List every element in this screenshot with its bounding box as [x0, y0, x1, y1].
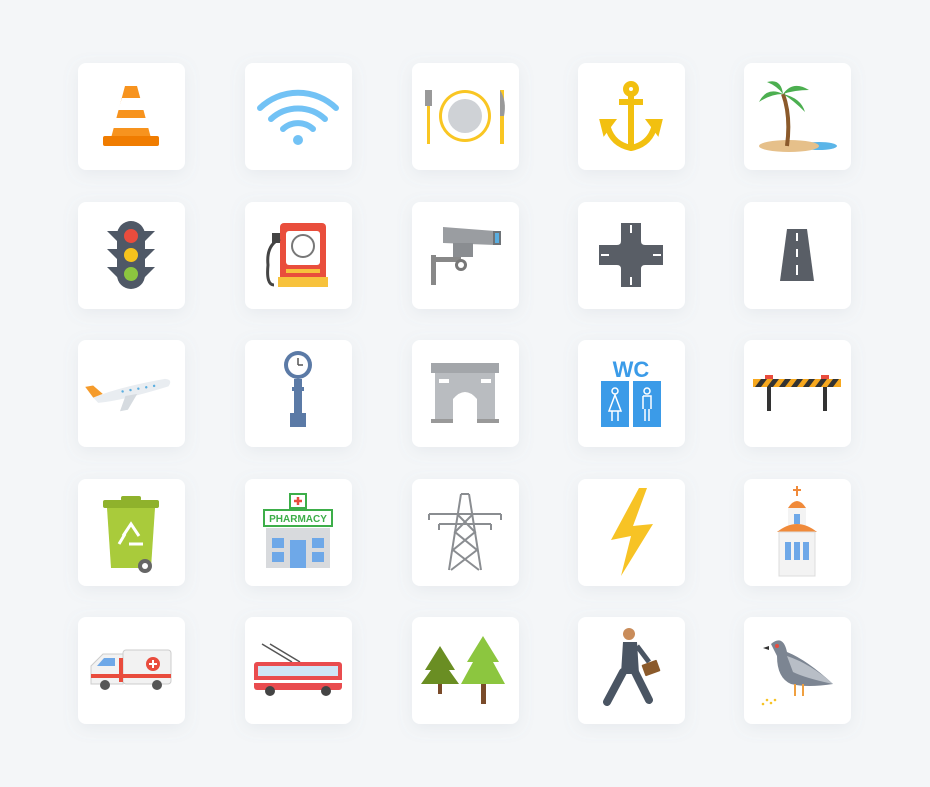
icon: wc sign: WC [613, 357, 649, 382]
icon: lightning [611, 488, 653, 576]
icon: power tower [429, 494, 501, 570]
tile: church [744, 479, 851, 586]
icon: road barrier [753, 375, 841, 411]
icon: anchor [603, 84, 659, 148]
tile: traffic cone [78, 63, 185, 170]
tile: lightning [578, 479, 685, 586]
tile: crossroad [578, 202, 685, 309]
icon: wifi [260, 93, 336, 145]
icon: plate and cutlery [425, 90, 505, 144]
icon: pharmacy: PHARMACY [269, 514, 327, 525]
tile: trees [412, 617, 519, 724]
tile: fuel pump [245, 202, 352, 309]
icon: street clock [284, 351, 312, 427]
tile: plane [78, 340, 185, 447]
icon: road [780, 229, 814, 281]
icon: businessman walking [607, 628, 661, 702]
tile: road [744, 202, 851, 309]
tile: arch [412, 340, 519, 447]
tile: recycle bin [78, 479, 185, 586]
icon: palm island [759, 81, 837, 152]
tile: plate [412, 63, 519, 170]
icon: cctv camera [431, 227, 501, 285]
tile: traffic light [78, 202, 185, 309]
icon: fuel pump [268, 223, 328, 287]
tile: walking man [578, 617, 685, 724]
icon: recycle bin [103, 496, 159, 573]
tile: trolleybus [245, 617, 352, 724]
tile: pharmacy [245, 479, 352, 586]
icon: crossroad [599, 223, 663, 287]
tile: street clock [245, 340, 352, 447]
tile: wc [578, 340, 685, 447]
icon: church [777, 486, 817, 576]
tile: anchor [578, 63, 685, 170]
tile: cctv [412, 202, 519, 309]
icon: trees [421, 636, 505, 704]
icon: traffic cone [103, 86, 159, 146]
tile: wifi [245, 63, 352, 170]
icon: trolleybus [254, 644, 342, 696]
icon: traffic light [107, 221, 155, 289]
icon: airplane [85, 372, 174, 416]
icon: triumphal arch [431, 363, 499, 423]
icon: pigeon [762, 640, 833, 705]
tile: island [744, 63, 851, 170]
tile: pigeon [744, 617, 851, 724]
tile: ambulance [78, 617, 185, 724]
tile: power tower [412, 479, 519, 586]
tile: barrier [744, 340, 851, 447]
icon: ambulance [91, 650, 171, 690]
